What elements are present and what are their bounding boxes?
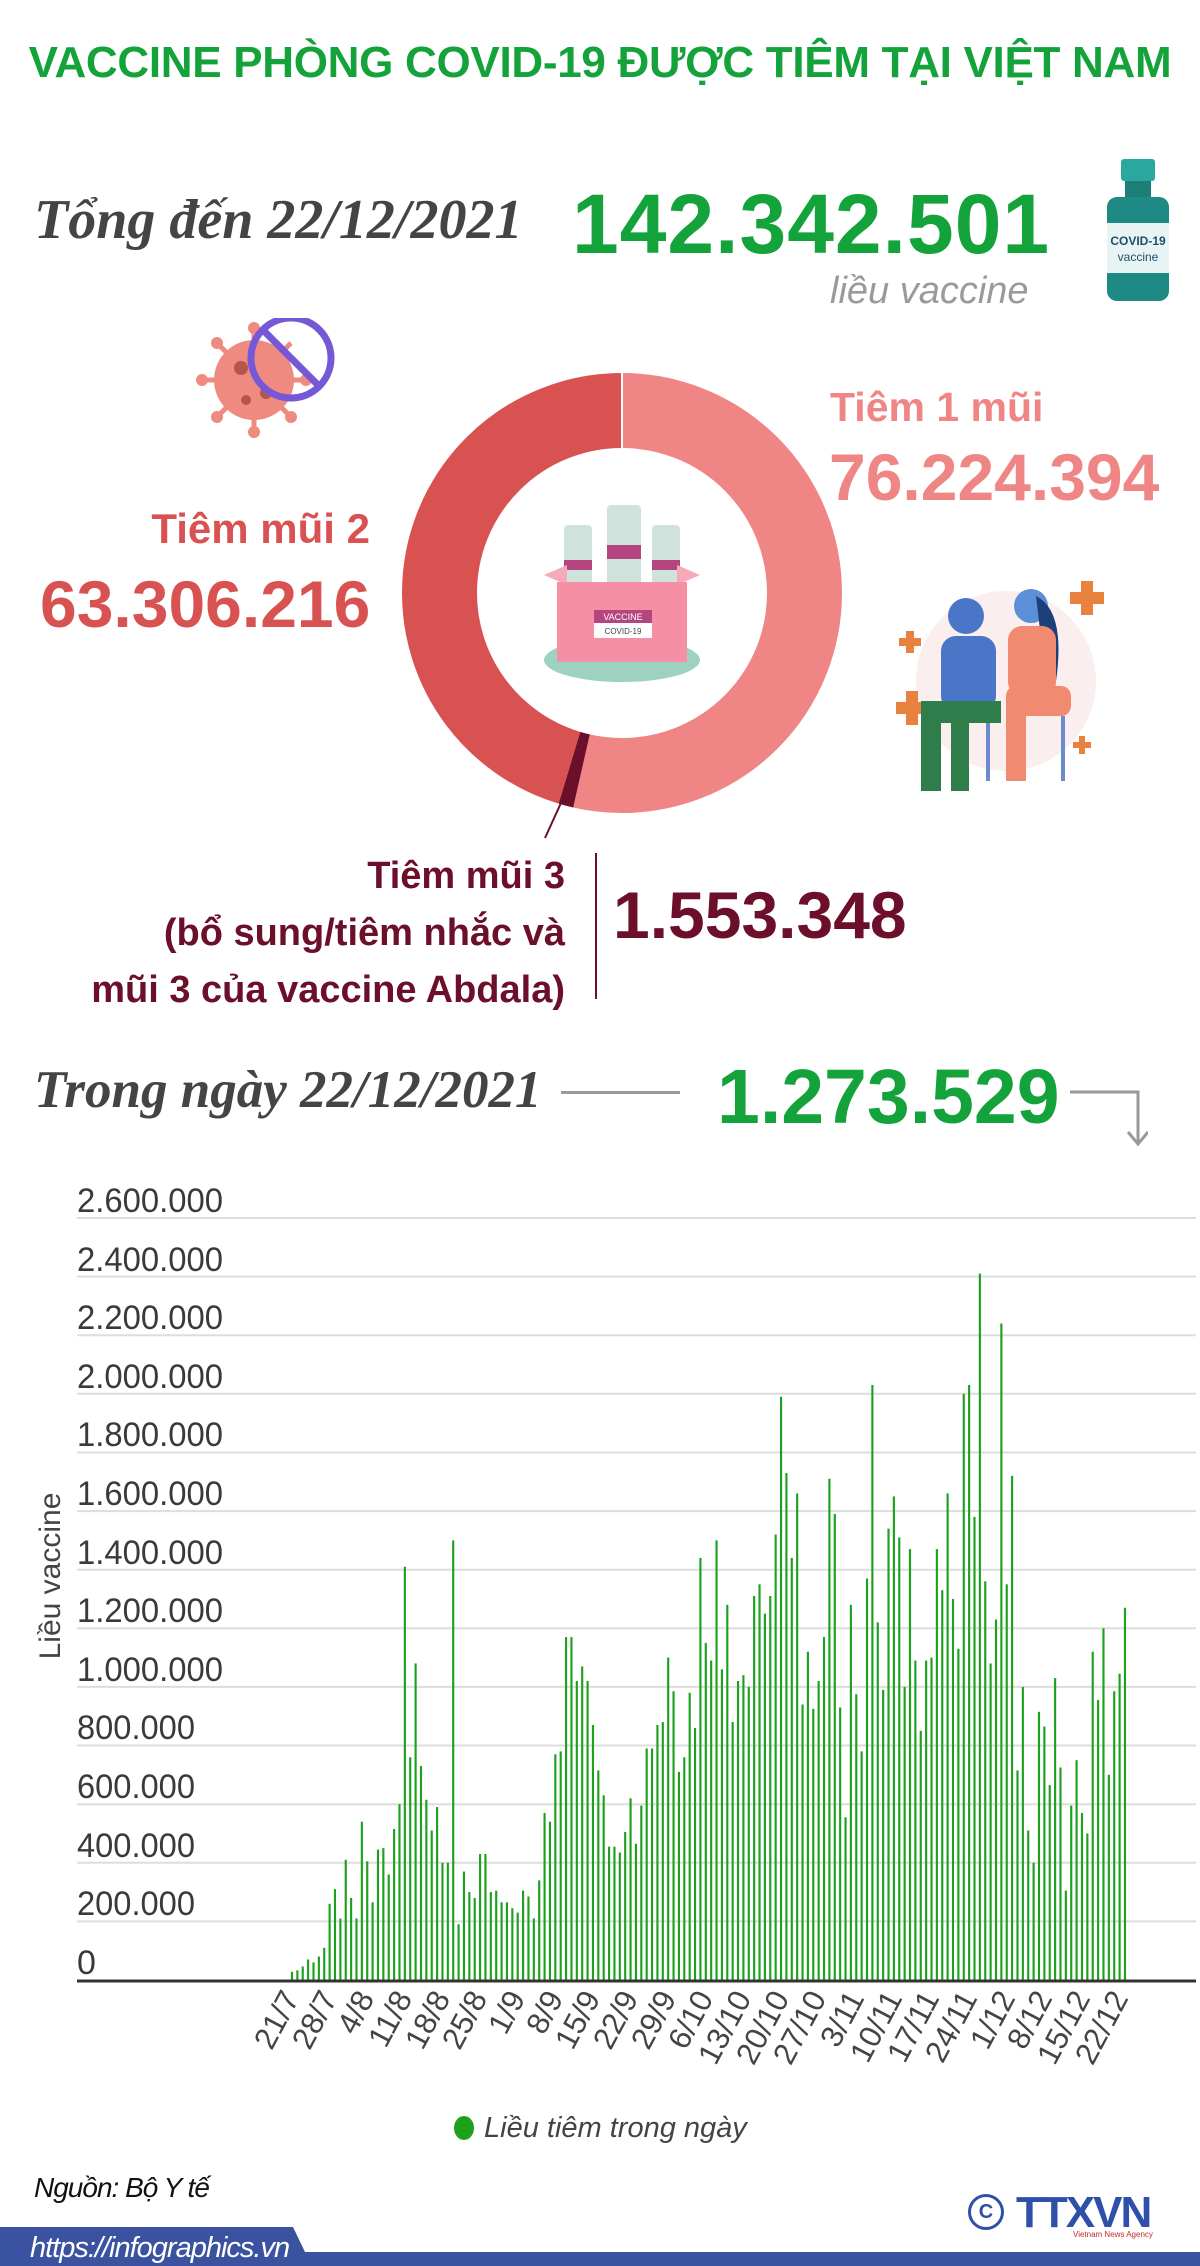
total unit: liều vaccine [830,270,1029,312]
label: dose 1: Tiêm 1 mũi [830,384,1043,430]
icon: vaccine vial: COVID-19 [1110,234,1166,248]
bar chart: 11/8 [361,1985,419,2053]
icon: vaccine box: VACCINE [603,612,643,622]
source: Nguồn: Bộ Y tế [34,2172,209,2203]
bar chart: 0 [77,1944,96,1982]
bar chart: 13/10 [691,1985,758,2070]
daily number: 1.273.529 [717,1054,1060,1140]
logo: TTXVN: C [979,2201,993,2223]
bar chart: 4/8 [330,1985,381,2039]
bar chart: 2.400.000 [77,1241,223,1279]
icon: vaccination illustration [896,581,1104,791]
bar chart: 1/12 [963,1985,1022,2055]
logo: TTXVN: TTXVN [1016,2188,1150,2237]
icon: vaccine vial: vaccine [1118,250,1159,264]
icon: vaccine box: COVID-19 [605,627,642,636]
bar chart: 17/11 [880,1985,946,2068]
logo: TTXVN [968,2188,1153,2239]
number: dose 2: 63.306.216 [40,567,370,641]
bar chart: 22/12 [1068,1985,1135,2070]
bar chart: 400.000 [77,1827,195,1865]
bar chart: 28/7 [285,1985,344,2055]
bar chart: 2.200.000 [77,1299,223,1337]
bar chart: 8/9 [519,1985,570,2039]
icon: vaccine box [544,505,700,682]
bar chart: 27/10 [766,1985,833,2070]
bar chart: 15/12 [1030,1985,1097,2070]
bar chart: 15/9 [548,1985,607,2055]
footer: https://infographics.vn [30,2232,289,2264]
bar chart: 10/11 [843,1985,909,2068]
label: dose 2: Tiêm mũi 2 [151,505,370,552]
arrow [1070,1090,1148,1146]
number: dose 3: 1.553.348 [613,878,907,952]
bar chart: Liều vaccine [34,1493,67,1659]
bar chart: 18/8 [398,1985,457,2055]
bar chart: 800.000 [77,1709,195,1747]
bar chart: 1/9 [481,1985,532,2039]
bar chart: 25/8 [435,1985,494,2055]
bar chart: 29/9 [624,1985,683,2055]
bar chart: 1.000.000 [77,1651,223,1689]
title: VACCINE PHÒNG COVID-19 ĐƯỢC TIÊM TẠI VIỆT NAM [29,38,1171,87]
icon: vaccine vial [1107,159,1169,301]
donut chart [402,373,842,838]
bar chart: 200.000 [77,1885,195,1923]
bar chart: 22/9 [586,1985,645,2055]
bar chart: 3/11 [813,1985,871,2053]
label: dose 3: Tiêm mũi 3 [367,855,565,897]
legend: Liều tiêm trong ngày [484,2112,747,2144]
bar chart: 1.800.000 [77,1416,223,1454]
number: dose 1: 76.224.394 [829,440,1159,514]
daily label: Trong ngày 22/12/2021 [34,1061,541,1119]
label: dose 3 [91,855,566,1011]
logo: TTXVN: Vietnam News Agency [1073,2230,1153,2239]
bar chart: 8/12 [1000,1985,1059,2055]
bar chart: 6/10 [661,1985,720,2055]
bar chart: 600.000 [77,1768,195,1806]
total label: Tổng đến 22/12/2021 [34,189,522,251]
label: dose 3: (bổ sung/tiêm nhắc và [164,912,565,954]
bar chart: 2.600.000 [77,1182,223,1220]
total number: 142.342.501 [572,177,1050,271]
label: dose 3: mũi 3 của vaccine Abdala) [91,969,565,1011]
icon: virus with prohibition sign [196,318,334,438]
bar chart: 1.400.000 [77,1534,223,1572]
bar chart: 21/7 [247,1985,306,2055]
bar chart: 20/10 [729,1985,796,2070]
bar chart: 1.600.000 [77,1475,223,1513]
bar chart: 2.000.000 [77,1358,223,1396]
bar chart: 1.200.000 [77,1592,223,1630]
bar chart: 24/11 [918,1985,984,2068]
